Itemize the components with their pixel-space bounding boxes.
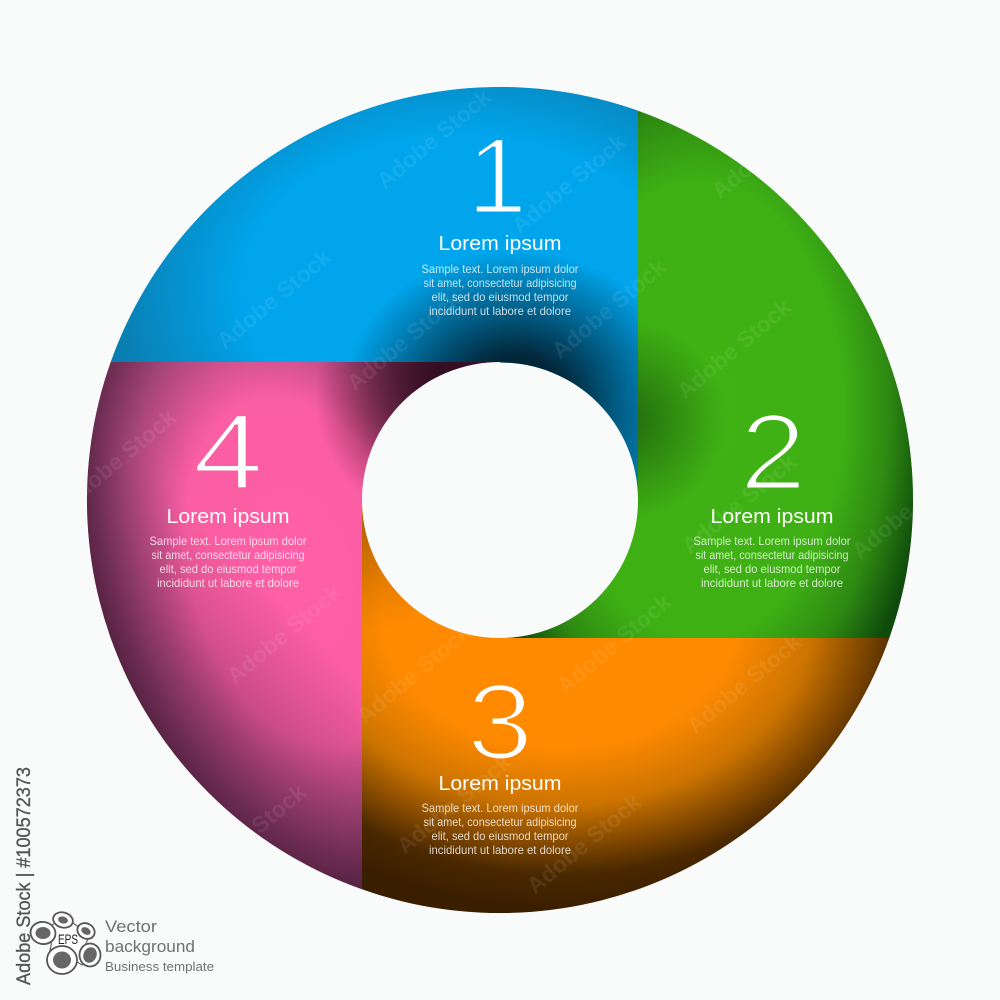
text block 2: sit amet, consectetur adipisicing [696,548,848,562]
text block 1 [422,262,579,318]
text block 3: elit, sed do eiusmod tempor [432,829,568,843]
text block 4 [150,534,307,590]
caption: Vector background: Vector [105,917,157,936]
text block 1: elit, sed do eiusmod tempor [432,290,568,304]
badge label: EPS [58,931,78,947]
watermark: Adobe Stock [372,83,496,194]
heading 2: Lorem ipsum [710,506,834,528]
caption: Vector background [105,917,214,974]
text block 2 [694,534,851,590]
watermark: Adobe Stock [57,403,181,514]
watermark: Adobe Stock [547,253,671,364]
watermark: Adobe Stock [187,778,311,889]
panel: segment 3 orange [362,500,889,913]
stock id label: Adobe Stock | #100572373 [14,767,35,985]
watermark: Adobe Stock [352,618,476,729]
panel: segment 4 pink [87,362,500,889]
panel: segment 1 blue [111,87,638,500]
text block 2: elit, sed do eiusmod tempor [704,562,840,576]
watermark: Adobe Stock [507,128,631,239]
text block 2: incididunt ut labore et dolore [701,576,843,590]
heading 3: Lorem ipsum [438,773,562,795]
watermark: Adobe Stock [677,448,801,559]
number 4: 4 [193,391,263,512]
watermark: Adobe Stock [522,788,646,899]
text block 4: Sample text. Lorem ipsum dolor [150,534,307,548]
icon: EPS badge [29,910,101,974]
text block 2: Sample text. Lorem ipsum dolor [694,534,851,548]
text block 1: sit amet, consectetur adipisicing [424,276,576,290]
watermark: Adobe Stock [682,628,806,739]
text block 3 [422,801,579,857]
watermark: Adobe Stock [342,285,466,396]
watermark: Adobe Stock [707,93,831,204]
text block 1: incididunt ut labore et dolore [429,304,571,318]
caption: Vector background: background [105,937,195,956]
text block 4: incididunt ut labore et dolore [157,576,299,590]
text block 3: sit amet, consectetur adipisicing [424,815,576,829]
text block 4: elit, sed do eiusmod tempor [160,562,296,576]
watermark [57,83,971,899]
panel: segment 2 green [500,111,913,638]
watermark: Adobe Stock [727,753,851,864]
watermark: Adobe Stock [212,243,336,354]
number 3: 3 [467,661,533,782]
number 1: 1 [467,115,527,236]
heading 1: Lorem ipsum [438,233,562,255]
watermark: Adobe Stock [392,748,516,859]
text block 3: Sample text. Lorem ipsum dolor [422,801,579,815]
watermark: Adobe Stock [512,453,636,564]
caption: Vector background: Business template [105,959,214,974]
text block 4: sit amet, consectetur adipisicing [152,548,304,562]
heading 4: Lorem ipsum [166,506,290,528]
watermark: Adobe Stock [847,453,971,564]
watermark: Adobe Stock [552,588,676,699]
text block 3: incididunt ut labore et dolore [429,843,571,857]
watermark: Adobe Stock [387,413,511,524]
watermark: Adobe Stock [222,578,346,689]
number 2: 2 [740,391,806,512]
watermark: Adobe Stock [672,293,796,404]
text block 1: Sample text. Lorem ipsum dolor [422,262,579,276]
